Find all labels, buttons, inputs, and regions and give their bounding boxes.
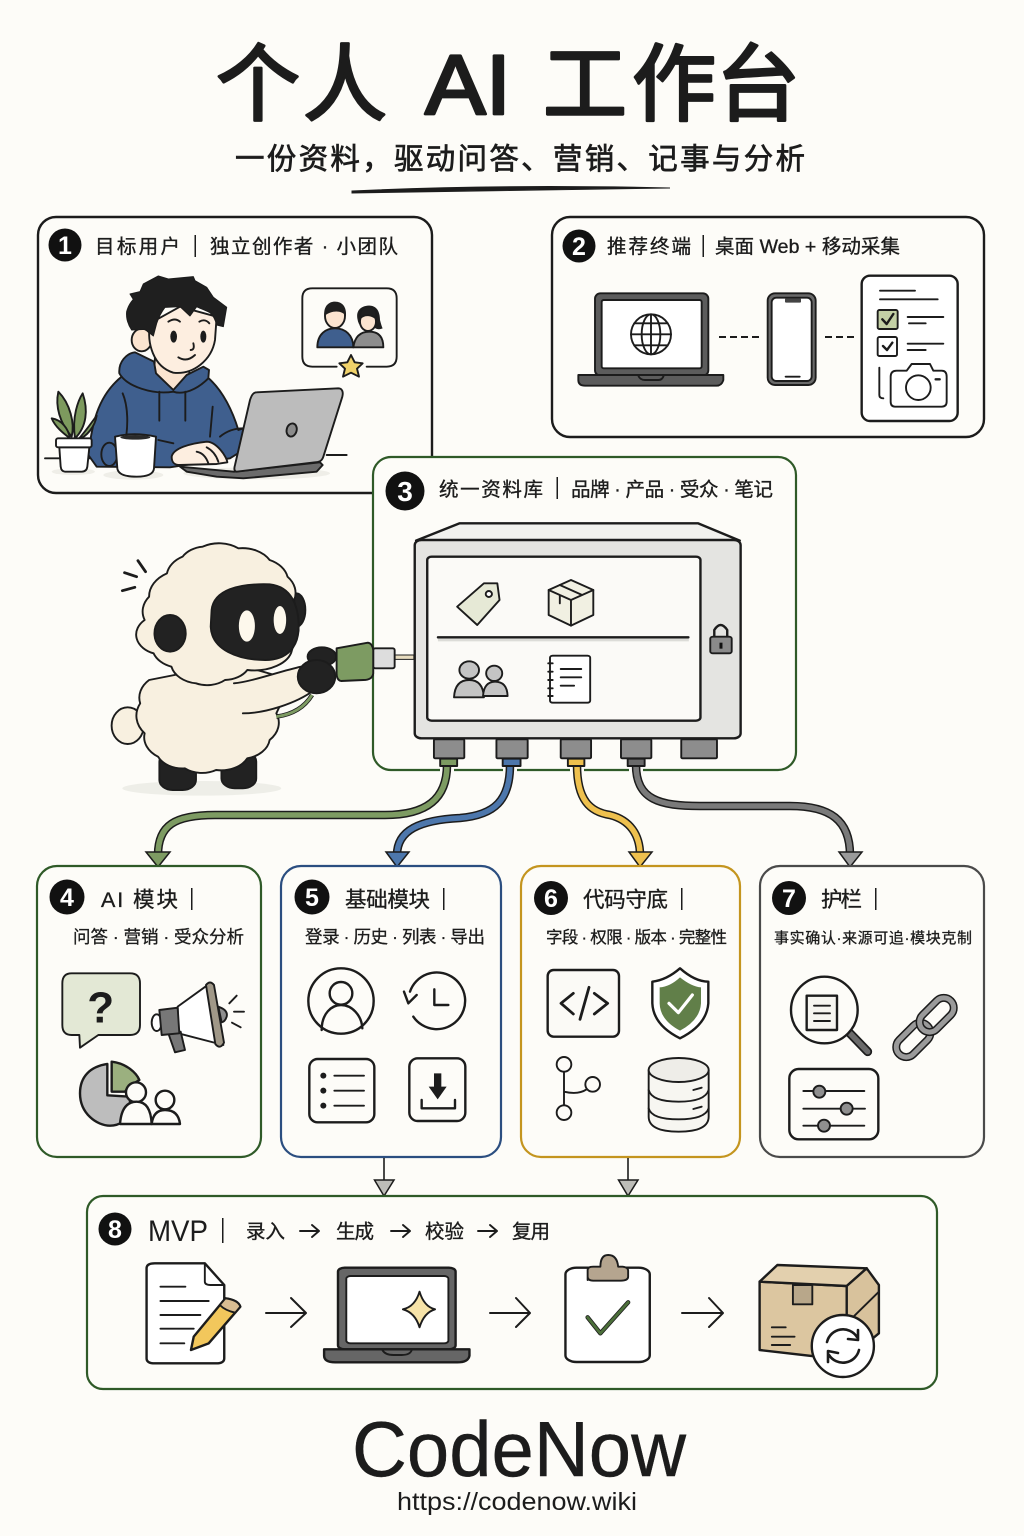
heading: AI module: 问答 · 营销 · 受众分析 [73, 927, 244, 947]
panel: target users [38, 217, 432, 493]
arrow: step 1 [266, 1298, 306, 1327]
title: 作 [632, 38, 716, 132]
icon: checklist with camera [862, 276, 958, 421]
number badge 4 [50, 880, 84, 914]
number badge 3: 3 [397, 476, 413, 507]
number badge 2: 2 [572, 233, 586, 261]
icon: git branch [557, 1057, 600, 1120]
icon: user [308, 968, 374, 1034]
icon: audience pie chart [80, 1062, 180, 1126]
title: 台 [716, 38, 800, 132]
icon: question bubble: ? [87, 983, 114, 1032]
subtitle: 一份资料，驱动问答、营销、记事与分析 [235, 143, 805, 176]
panel: AI module [37, 866, 261, 1157]
heading: code guarantee: 代码守底 [583, 888, 668, 912]
heading: code guarantee [546, 888, 727, 947]
arrow: code module to MVP [618, 1158, 638, 1196]
title: AI [425, 38, 511, 132]
heading: MVP flow: 生成 [336, 1221, 374, 1243]
data cabinet [415, 523, 741, 738]
number badge 4: 4 [60, 884, 74, 912]
cable: green to AI module [146, 765, 447, 867]
title: 工 [543, 38, 627, 132]
number badge 3 [386, 472, 424, 510]
cable: gray to guardrail module [636, 765, 862, 867]
heading: recommended devices: 桌面 Web + 移动采集 [715, 236, 900, 258]
icon: sliders [789, 1069, 878, 1139]
heading: unified knowledge base: 品牌 · 产品 · 受众 · 笔记 [571, 479, 773, 501]
arrow: step 2 [490, 1298, 530, 1327]
arrow: step 3 [682, 1298, 723, 1327]
heading: guardrails [774, 888, 972, 947]
heading: AI module: AI 模块 [101, 888, 178, 912]
icon: database [649, 1058, 709, 1132]
number badge 8: 8 [108, 1216, 122, 1244]
cable: blue to base module [386, 765, 510, 867]
number badge 1: 1 [58, 232, 72, 260]
icon: phone [768, 293, 816, 385]
cable: yellow to code module [577, 765, 652, 867]
icon: laptop with globe [578, 293, 723, 386]
heading: recommended devices [607, 235, 900, 258]
number badge 7 [772, 881, 806, 915]
number badge 8 [98, 1212, 132, 1246]
number badge 1 [48, 228, 82, 262]
heading: guardrails: 事实确认·来源可追·模块克制 [774, 930, 972, 947]
number badge 5: 5 [305, 884, 319, 912]
illustration: creator at laptop [45, 276, 397, 480]
heading: base module: 登录 · 历史 · 列表 · 导出 [305, 927, 485, 947]
panel: code guarantee [521, 866, 740, 1157]
panel: recommended devices [552, 217, 984, 437]
cabinet ports and collars [434, 739, 717, 766]
icon: chain link [892, 994, 958, 1061]
icon: code [548, 970, 619, 1037]
heading: MVP flow [148, 1215, 550, 1248]
mascot: sheep plugging in cable [112, 543, 414, 796]
icon: clipboard check [565, 1255, 650, 1362]
icon: megaphone [152, 982, 244, 1052]
heading: base module [305, 888, 485, 947]
panel: guardrails [760, 866, 984, 1157]
title: 个 [216, 38, 300, 132]
icon: laptop with sparkle [324, 1268, 469, 1362]
title [216, 38, 800, 132]
icon: magnifier over document [791, 977, 868, 1052]
heading: target users: 目标用户 [95, 236, 180, 258]
connector: dashed lines [719, 336, 855, 338]
panel: MVP flow [87, 1196, 937, 1389]
heading: unified knowledge base [439, 477, 773, 501]
icon: shield check [652, 968, 708, 1038]
footer: website url: https://codenow.wiki [397, 1488, 637, 1516]
heading: guardrails: 护栏 [821, 888, 862, 912]
heading: recommended devices: 推荐终端 [607, 236, 691, 258]
heading: MVP flow: 复用 [512, 1221, 550, 1243]
icon: export download [409, 1058, 465, 1121]
icon: document and pencil [147, 1263, 240, 1363]
heading: MVP flow: 校验 [425, 1221, 464, 1243]
panel: unified knowledge base [373, 457, 796, 770]
heading: target users [95, 235, 398, 258]
panel: base module [281, 866, 501, 1157]
subtitle underline [352, 187, 670, 193]
number badge 6: 6 [544, 885, 558, 913]
icon: question bubble [62, 973, 140, 1048]
number badge 7: 7 [782, 885, 796, 913]
heading: target users: 独立创作者 · 小团队 [210, 236, 398, 258]
heading: unified knowledge base: 统一资料库 [439, 479, 543, 501]
heading: base module: 基础模块 [345, 888, 430, 912]
heading: MVP flow: 录入 [246, 1221, 285, 1243]
number badge 5 [294, 880, 330, 914]
heading: AI module [73, 888, 244, 947]
icon: refresh arrows [827, 1329, 859, 1363]
heading: MVP flow: MVP [148, 1215, 208, 1248]
icon: history clock [404, 972, 465, 1029]
footer: brand name: CodeNow [352, 1405, 687, 1493]
icon: parcel with refresh [760, 1265, 879, 1377]
cables and arrowheads [146, 765, 862, 867]
heading: code guarantee: 字段 · 权限 · 版本 · 完整性 [546, 928, 727, 947]
number badge 6 [534, 881, 568, 915]
icon: list [309, 1059, 374, 1122]
title: 人 [303, 38, 387, 132]
arrow: base module to MVP [374, 1158, 394, 1196]
number badge 2 [562, 230, 596, 262]
